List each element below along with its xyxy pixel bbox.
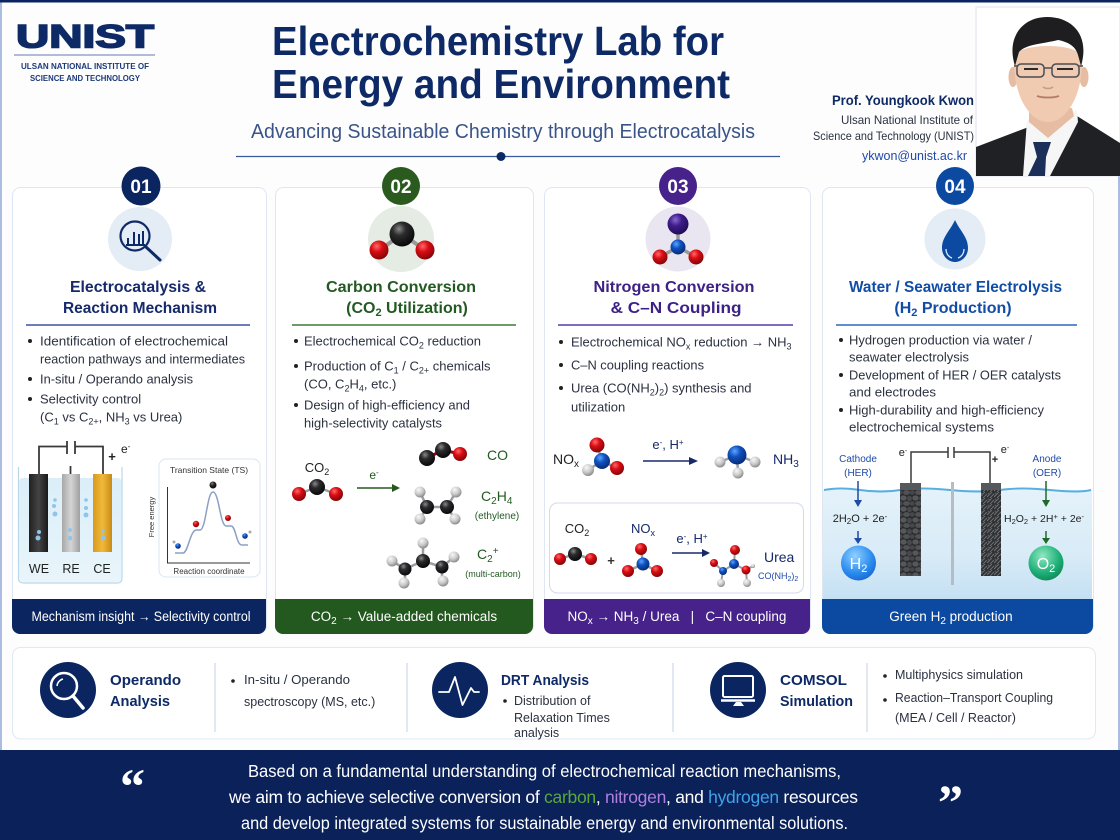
electrode: RE [62,474,80,552]
electrolysis cell diagram: + [992,454,998,466]
bullet list: high-selectivity catalysts [304,416,442,430]
heading: Reaction Mechanism [63,300,217,317]
method: COMSOL simulation: Simulation [780,693,853,710]
bullet list: 2 [344,384,349,394]
footer text: → NH [593,609,633,624]
icon: water drop [924,208,986,270]
method: COMSOL simulation: COMSOL [780,672,847,689]
circuit wires [911,447,990,483]
reactant: CO2: CO [305,460,324,475]
electrode: WE [29,474,48,552]
cathode side: - [885,512,888,521]
arrow: e [676,531,684,546]
bullet list: and electrodes [849,384,937,400]
footer text: → Value-added chemicals [337,609,497,624]
method: DRT analysis: Relaxation Times [514,711,610,725]
urea synthesis box: + [607,553,615,568]
heading: (CO [346,300,375,317]
bullet list: 1 [54,416,59,426]
bullet list: seawater electrolysis [849,350,969,364]
bullet list: Selectivity control [40,392,141,406]
bullet list: 2 [419,340,424,350]
footer text: production [946,609,1013,624]
reactant: NOx: NO [631,521,650,536]
opening quote mark: “ [120,758,145,814]
cathode side: H [850,556,861,573]
vision statement banner [0,750,1120,840]
bullet list: (CO, C [304,376,344,392]
arrow: , H [686,531,703,546]
polarity labels: e [899,447,905,459]
reactant: NOx [622,521,663,577]
bullet list: vs Urea) [130,410,182,424]
anode side [1004,454,1085,580]
heading: 2 [911,307,917,319]
three-electrode cell diagram: e [121,442,128,456]
anode electrode [981,483,1001,576]
heading: Production) [917,300,1012,317]
method: COMSOL simulation: Multiphysics simulation [895,668,1023,682]
heading: Nitrogen Conversion [594,279,754,296]
electrolysis cell diagram: e [1001,444,1007,456]
title: Energy and Environment [272,61,730,107]
cathode side: 2 [847,517,852,526]
closing quote mark: ” [938,774,963,830]
footer text: 3 [633,616,639,627]
method: DRT analysis: Distribution of [514,694,591,708]
anode side: Anode [1033,454,1062,465]
logo wordmark: UNIST [16,18,155,54]
bullet list [294,334,491,430]
free-energy diagram: Free energy [147,497,156,537]
card frame [276,188,534,634]
professor contact info: ykwon@unist.ac.kr [862,149,967,163]
reactant: NOx: x [574,459,579,470]
footer text: 2 [940,616,946,627]
method: DRT analysis: DRT Analysis [501,672,589,689]
arrow: , H [662,437,679,452]
method: operando analysis: In-situ / Operando [244,673,350,687]
product: urea: ) [791,571,794,581]
three-electrode cell diagram: - [128,442,131,451]
heading: & C–N Coupling [610,300,742,317]
bullet list: electrochemical systems [849,420,994,434]
anode side: (OER) [1033,468,1061,479]
electrolysis cell diagram [824,444,1091,585]
bullet list: Hydrogen production via water / [849,332,1032,348]
logo: UNIST: SCIENCE AND TECHNOLOGY [30,73,140,83]
arrow: e [369,468,376,482]
bullet list: ) [655,380,659,396]
number badge: 02 [390,177,412,198]
bullet list: 2+ [419,366,429,376]
reactant: CO2: CO [565,521,584,536]
anode side: O [1037,556,1049,573]
water surface [824,488,1091,492]
panel: 03 nitrogen conversion [544,167,810,634]
number badge [936,167,974,205]
free-energy diagram [147,459,260,577]
professor contact info: Ulsan National Institute of [841,113,974,127]
bullet list [839,332,1061,434]
bullet list: C–N coupling reactions [571,358,704,372]
icon: magnifier [40,662,96,718]
cathode side: 2 [861,563,867,575]
card frame [544,188,810,634]
NOx to NH3 scheme [553,437,799,478]
reactant: NOx: NO [553,451,574,467]
bullet list: Production of C [304,358,394,374]
cathode side [833,454,888,580]
footer bar [544,599,810,634]
bullet list: utilization [571,400,625,414]
bullet list: reduction [424,334,481,348]
electrode labels [29,562,111,576]
bullet list: reduction → NH [690,334,786,350]
product: C2+: C [477,546,487,562]
anode side: 2 [1049,563,1055,575]
logo subtitle: ULSAN NATIONAL INSTITUTE OF [21,61,149,71]
number badge [382,167,420,205]
reactant: CO2 [292,460,343,501]
heading: 2 [375,307,382,319]
bubbles [36,498,106,540]
free-energy diagram: Transition State (TS) [170,465,248,475]
beaker [18,467,122,583]
bullet list: 2 [659,388,664,398]
bullet list: H [349,376,359,392]
bullet list [28,334,245,426]
free-energy diagram: Reaction coordinate [173,567,245,576]
product: C2+: + [493,546,499,557]
panel: 02 carbon conversion [275,167,534,634]
product: C2H4: (ethylene) [475,511,519,522]
bullet list: Development of HER / OER catalysts [849,368,1061,382]
subtitle: Advancing Sustainable Chemistry through Electrocatalysis [251,121,755,143]
top bar [0,0,1120,2]
icon: CO2 molecule [368,206,434,272]
product: C2H4: C [481,488,491,504]
product: C2+: (multi-carbon) [465,569,521,579]
title: Electrochemistry Lab for [272,18,724,64]
footer bar [822,599,1093,634]
CO2 reduction scheme [292,442,521,588]
product: NH3: NH [773,451,793,467]
statement text: Based on a fundamental understanding of electrochemical reaction mechanisms, [248,761,841,781]
reactant: CO2 [554,521,597,565]
product: C2H4 [414,486,519,524]
anode side: H [1004,513,1012,525]
bullet list: reaction pathways and intermediates [40,352,245,366]
heading [594,279,754,317]
product: CO [419,442,508,466]
number badge [659,167,697,205]
electrode labels: WE [29,562,49,576]
bullet list: (C [40,410,54,424]
bullet list: Electrochemical CO [304,334,419,348]
heading [63,279,217,317]
statement text: and develop integrated systems for sustainable energy and environmental solutions. [241,813,848,833]
panel: analysis methods [12,648,1096,740]
reactant: CO2: 2 [584,528,589,538]
electrode labels: CE [93,562,111,576]
title divider [236,152,780,161]
product: urea: Urea [764,549,795,565]
cathode electrode [900,483,921,576]
heading: (H [894,300,911,317]
bullet list: , NH [99,410,125,424]
electrode: CE [93,474,112,552]
card frame [12,188,266,634]
cathode side: O + 2e [851,513,885,525]
cathode side: 2H [833,513,847,525]
bullet list: , etc.) [364,376,396,392]
footer text: NO [568,609,588,624]
bullet list: 2 [650,388,655,398]
title [272,18,730,107]
arrow: + [703,532,708,541]
heading [849,279,1062,319]
method: COMSOL simulation: (MEA / Cell / Reactor) [895,711,1016,725]
heading [326,279,476,319]
professor contact info: Prof. Youngkook Kwon [832,93,974,108]
icon: monitor [710,662,766,718]
number badge [122,166,160,206]
arrow [672,531,710,557]
method: DRT analysis: analysis [514,726,559,740]
bullet list: 1 [394,366,399,376]
anode side: - [1082,512,1085,521]
product: C2H4: H [497,488,507,504]
cathode side: Cathode [839,454,877,465]
three-electrode cell diagram [18,441,131,583]
bullet list: chemicals [429,358,491,374]
professor contact info: Science and Technology (UNIST) [813,129,974,143]
icon: magnifier with bars [108,207,172,271]
arrow: - [376,468,379,477]
polarity labels: - [905,448,908,455]
anode side: 2 [1024,517,1028,526]
bullet list: Identification of electrochemical [40,334,228,348]
method: operando analysis: Operando [110,672,181,689]
product: urea: CO(NH [758,571,788,581]
anode side: + 2H [1028,513,1053,525]
bullet list: Design of high-efficiency and [304,398,470,412]
anode side: O [1016,513,1024,525]
reactant: CO2: 2 [324,467,329,477]
logo: UNIST [14,18,155,83]
arrow [357,468,400,492]
product: NH3: 3 [793,459,799,470]
bullet list: High-durability and high-efficiency [849,402,1044,418]
method: COMSOL simulation [710,662,1053,725]
product: C2H4: 2 [491,496,497,507]
number badge: 04 [944,177,966,198]
bullet list [559,334,791,414]
footer bar [12,599,266,634]
bullet list: 3 [786,342,791,352]
method: operando analysis: Analysis [110,693,170,710]
number badge: 01 [130,177,152,198]
statement text [228,761,858,833]
anode side: + 2e [1058,513,1082,525]
method: operando analysis [40,662,375,718]
footer text: x [588,616,593,627]
methods frame [12,648,1096,739]
product: NH3 [714,446,799,478]
method: DRT analysis [432,662,610,740]
footer text: CO [311,609,331,624]
heading: Carbon Conversion [326,279,476,296]
product: CO: CO [487,447,508,463]
product: C2H4: 4 [507,496,513,507]
panel: 01 electrocatalysis [12,166,266,634]
heading: Utilization) [382,300,468,317]
arrow: - [684,532,687,541]
product: urea: 2 [794,576,798,583]
bullet list: 3 [125,416,130,426]
electrolysis cell diagram: - [1007,445,1010,452]
statement text: we aim to achieve selective conversion of carbon, nitrogen, and hydrogen resources [228,787,858,807]
icon: pulse [432,662,488,718]
electrode labels: RE [62,562,80,576]
urea synthesis box [550,503,804,593]
product: urea: 2 [788,576,792,583]
footer bar [275,599,533,634]
cathode side: (HER) [844,468,872,479]
card frame [822,188,1094,634]
bullet list: / C [399,358,419,374]
heading: Water / Seawater Electrolysis [849,279,1062,296]
bullet list: x [686,342,691,352]
icon: nitrogen oxide molecule [646,206,710,272]
arrow: e [652,437,660,452]
footer text: 2 [331,616,337,627]
product: urea [710,545,798,587]
bullet list: 4 [359,384,364,394]
bullet list: vs C [59,410,88,424]
product: C2+: 2 [487,554,493,565]
anode side: + [1053,512,1058,521]
membrane [951,482,954,585]
number badge: 03 [667,177,689,198]
anode side: 2 [1012,517,1016,526]
arrow: - [660,438,663,447]
bullet list: In-situ / Operando analysis [40,372,193,386]
portrait photo [976,7,1120,176]
bullet list: Urea (CO(NH [571,380,650,396]
circuit wires [39,441,103,474]
bullet list: 2+ [88,416,99,426]
panel: 04 water electrolysis [822,167,1094,634]
polarity labels: + [108,449,116,464]
product: C2+ [386,538,521,588]
footer text: Mechanism insight → Selectivity control [32,609,250,624]
reactant: NOx [553,438,624,476]
bullet list: Electrochemical NO [571,334,686,350]
arrow: + [679,438,684,447]
professor contact info [813,93,974,163]
heading: Electrocatalysis & [70,279,206,296]
arrow [643,437,698,465]
footer text: / Urea | C–N coupling [639,609,786,624]
method: COMSOL simulation: Reaction–Transport Coupling [895,691,1053,705]
bullet list: ) synthesis and [664,380,752,396]
footer text: Green H [889,609,940,624]
electrolyte water [823,490,1092,600]
method: operando analysis: spectroscopy (MS, etc.) [244,695,375,709]
reactant: NOx: x [650,528,656,538]
